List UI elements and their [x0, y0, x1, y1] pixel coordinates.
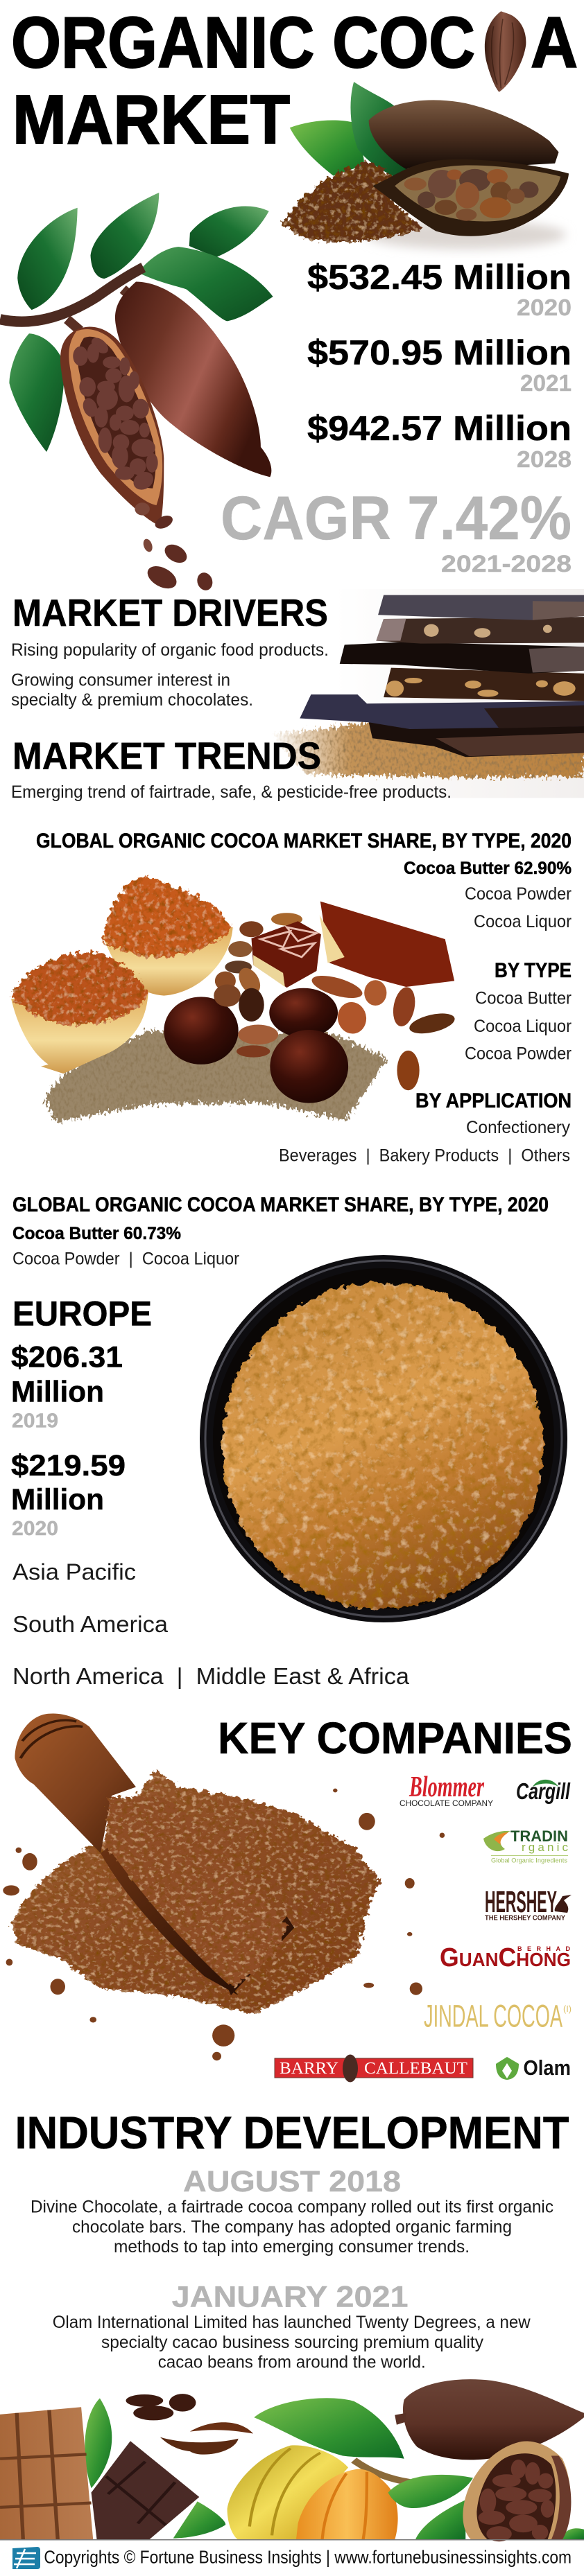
regional heading and segments — [12, 1193, 549, 1269]
illustration: cocoa branch with pods and leaves — [0, 193, 273, 593]
open pod beans — [73, 335, 158, 493]
development: January 2021: specialty cacao business sourcing premium quality — [101, 2333, 483, 2352]
development: January 2021: JANUARY 2021 — [172, 2281, 409, 2314]
key companies heading: KEY COMPANIES — [218, 1713, 572, 1763]
photo: wooden scoop in cocoa powder — [3, 1713, 445, 2060]
type and application segments: Confectionery — [466, 1118, 570, 1137]
scoop handle — [15, 1713, 136, 1853]
market drivers: Growing consumer interest in — [11, 671, 230, 690]
falling beans — [135, 502, 215, 593]
logo: Tradin Organic: rganic — [522, 1841, 569, 1854]
market size figures: 2021 — [520, 370, 572, 396]
market drivers: Rising popularity of organic food products. — [11, 640, 329, 660]
back bowl — [103, 927, 233, 996]
cocoa dust — [272, 722, 584, 778]
open pod — [60, 327, 164, 526]
logo: Guan Chong: GUANCHONG — [440, 1943, 571, 1972]
whole brown pod — [403, 2379, 584, 2460]
logo: Barry Callebaut: BARRY — [280, 2060, 338, 2078]
title: MARKET — [12, 81, 290, 159]
leaf: back — [350, 82, 408, 177]
logo: Olam: Olam — [523, 2056, 571, 2080]
logo: Tradin Organic: Global Organic Ingredients — [491, 1857, 568, 1864]
Asia Pacific: Asia Pacific — [12, 1559, 136, 1585]
nib pile — [281, 162, 422, 242]
logo: Tradin Organic — [483, 1828, 569, 1864]
development: January 2021 — [53, 2281, 531, 2372]
illustration: cocoa pods, leaves and nibs — [281, 82, 569, 249]
company logos — [275, 1771, 572, 2082]
leaves beside half pod — [388, 2475, 473, 2508]
market drivers — [11, 591, 329, 710]
regional heading and segments: Cocoa Butter 60.73% — [12, 1224, 181, 1243]
type and application segments: Cocoa Butter — [475, 989, 572, 1008]
scoop contents — [106, 1797, 286, 1987]
whole pod — [369, 100, 559, 169]
bar 2 — [376, 617, 584, 644]
type and application segments: Beverages | Bakery Products | Others — [279, 1146, 570, 1166]
bar 5 — [300, 694, 584, 729]
shadow — [365, 220, 566, 249]
leaf 2 — [90, 193, 159, 279]
Europe regional figures: Million — [11, 1376, 104, 1409]
type and application segments — [279, 859, 572, 1166]
logo: Guan Chong: BERHAD — [517, 1945, 570, 1952]
market size figures: $570.95 Million — [307, 333, 572, 372]
cocoa butter share: Cocoa Butter 62.90% — [404, 859, 572, 878]
type and application segments: Cocoa Liquor — [474, 1017, 572, 1036]
bar 1 — [378, 595, 584, 620]
dark chocolates and beans — [164, 913, 456, 1103]
other regions: South America — [12, 1611, 169, 1637]
logo: Blommer: Blommer — [409, 1771, 484, 1803]
footer rule — [0, 2539, 584, 2541]
nuts bar 4 — [386, 678, 576, 697]
type and application segments: Cocoa Powder — [465, 1044, 572, 1063]
stem — [354, 2460, 410, 2482]
half shell — [372, 159, 569, 236]
logo: Blommer: CHOCOLATE COMPANY — [400, 1798, 493, 1808]
Europe regional figures: Million — [11, 1483, 104, 1516]
bar 3 — [340, 642, 584, 674]
powder — [222, 1282, 544, 1609]
heading: MARKET DRIVERS — [12, 591, 328, 634]
development: August 2018 — [31, 2165, 553, 2257]
heading: MARKET TRENDS — [12, 735, 321, 778]
bar 6 — [369, 722, 584, 757]
backdrop — [335, 589, 584, 798]
market size figures: $942.57 Million — [307, 409, 572, 448]
coffee-like beans — [126, 2394, 196, 2420]
title: ORGANIC COC — [11, 3, 475, 83]
development: August 2018: AUGUST 2018 — [183, 2165, 401, 2198]
front bowl — [11, 991, 148, 1074]
logo: Barry Callebaut: CALLEBAUT — [364, 2060, 467, 2078]
CAGR callout: 2021-2028 — [441, 551, 572, 577]
photo: cocoa powder bowls, chocolates and burlap — [11, 876, 456, 1122]
logo: Fortune Business Insights — [12, 2547, 40, 2569]
leaf 5 — [9, 333, 65, 452]
stray clumps — [3, 1789, 445, 2060]
CAGR callout: CAGR 7.42% — [221, 483, 572, 552]
type and application segments: BY TYPE — [495, 959, 572, 982]
photo: stacked chocolate bars — [272, 589, 584, 798]
market size figures — [307, 258, 572, 472]
market size figures: 2020 — [517, 295, 572, 320]
logo: Olam — [496, 2056, 571, 2080]
half pod — [463, 2442, 571, 2540]
scoop body edges — [101, 1848, 294, 1995]
title: A — [531, 3, 578, 83]
development: August 2018: Divine Chocolate, a fairtrade cocoa company rolled out its first organic — [31, 2197, 553, 2216]
development: January 2021: cacao beans from around the world. — [158, 2353, 426, 2372]
illustration: chocolate, beans and cacao pods — [0, 2379, 584, 2541]
market size figures: 2028 — [517, 446, 572, 472]
logo: Hershey: THE HERSHEY COMPANY — [485, 1914, 565, 1922]
whole pod — [115, 281, 271, 477]
branch — [0, 268, 144, 322]
logo: Blommer — [400, 1771, 493, 1808]
value 2020: $532.45 Million — [307, 258, 572, 297]
Europe regional figures: 2019 — [12, 1410, 58, 1432]
logo: Tradin Organic: TRADIN — [510, 1828, 568, 1845]
logo: Jindal Cocoa: (I) — [563, 2004, 572, 2014]
burlap cloth — [44, 1031, 387, 1122]
chocolate swooshes — [190, 2422, 253, 2434]
milk chocolate bar — [0, 2407, 93, 2540]
leaf 1 — [17, 208, 78, 310]
leaf: left — [290, 120, 364, 176]
development: August 2018: chocolate bars. The company has adopted organic farming — [72, 2217, 512, 2236]
small leaf — [173, 2501, 225, 2539]
yellow pod — [227, 2445, 348, 2540]
powder pile — [11, 1770, 380, 2014]
icon: cocoa pod replacing the letter O — [485, 11, 526, 92]
Europe regional figures — [11, 1295, 152, 1540]
type and application segments: BY APPLICATION — [415, 1089, 572, 1112]
type and application segments: Cocoa Liquor — [474, 912, 572, 931]
market trends: Emerging trend of fairtrade, safe, & pesticide-free products. — [11, 782, 452, 802]
leaf 3 — [189, 207, 269, 257]
development: January 2021: Olam International Limited has launched Twenty Degrees, a new — [53, 2313, 531, 2332]
Europe regional figures: $219.59 — [11, 1449, 126, 1482]
dark chocolate bar — [92, 2441, 199, 2540]
bowl rim — [200, 1255, 567, 1622]
regional heading and segments: Cocoa Powder | Cocoa Liquor — [12, 1250, 239, 1269]
market drivers: specialty & premium chocolates. — [11, 690, 253, 710]
Europe regional figures: $206.31 — [11, 1340, 123, 1374]
market trends — [11, 735, 452, 802]
region name: EUROPE — [12, 1295, 152, 1333]
photo: bowl of cocoa powder — [200, 1255, 567, 1622]
logo: Barry Callebaut — [275, 2054, 473, 2082]
bar 4 — [384, 668, 584, 701]
other regions: North America | Middle East & Africa — [12, 1663, 410, 1689]
orange pod — [296, 2469, 398, 2540]
chocolate bars — [320, 902, 454, 987]
other regions — [12, 1559, 410, 1689]
development: August 2018: methods to tap into emerging consumer trends. — [114, 2237, 470, 2257]
type and application segments: Cocoa Powder — [465, 884, 572, 904]
Europe regional figures: 2020 — [12, 1518, 58, 1540]
leaf behind milk bar — [85, 2399, 112, 2488]
beans in shell — [404, 169, 539, 221]
title — [11, 3, 578, 159]
leaf 4 — [138, 247, 273, 321]
large leaf — [254, 2398, 404, 2459]
